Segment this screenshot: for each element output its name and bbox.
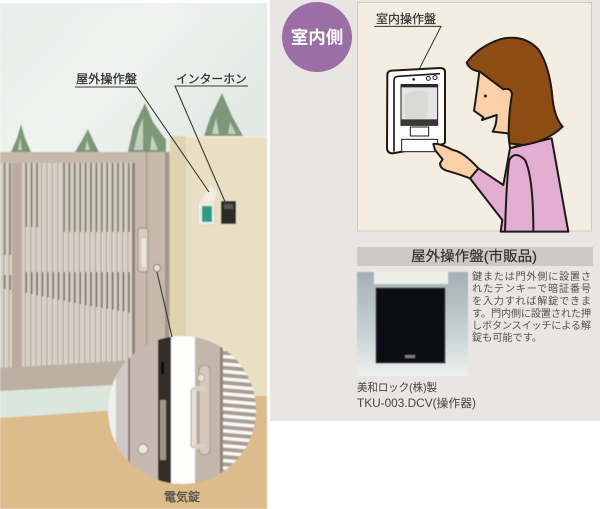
heading: outdoor operator panel (retail): 屋外操作盤(市販品): [411, 248, 537, 264]
label: indoor operator panel: 室内操作盤: [376, 11, 436, 26]
product caption: [357, 380, 476, 410]
woman: face: [474, 72, 527, 148]
gate vertical slats: [0, 163, 134, 368]
panel: outdoor gate photo: [0, 3, 267, 509]
product photo: operator panel: [357, 272, 468, 376]
gate frame: [0, 152, 134, 163]
badge: indoor side: [282, 2, 352, 72]
description text: を入力すれば解錠できま: [472, 294, 591, 308]
magnifier: electric lock detail: [108, 336, 259, 486]
badge: indoor side: 室内側: [291, 28, 343, 48]
description text: 鍵または門外側に設置さ: [472, 270, 591, 283]
product caption: TKU-003.DCV(操作器): [357, 396, 476, 410]
product caption: 美和ロック(株)製: [357, 380, 437, 394]
label: outdoor operator panel: 屋外操作盤: [76, 71, 137, 86]
trees behind gate: [11, 93, 243, 152]
boundary wall: [170, 136, 267, 396]
description text: す。門内側に設置された押: [472, 307, 591, 320]
sky background: [0, 3, 267, 153]
ground: [0, 396, 267, 509]
indoor wall monitor: [387, 68, 445, 153]
description text: れたテンキーで暗証番号: [472, 283, 591, 295]
woman: hand: [433, 144, 478, 178]
heading: outdoor operator panel (retail): [357, 247, 593, 266]
plinth: [0, 380, 118, 418]
right background panel: [270, 0, 600, 421]
intercom unit: [221, 201, 236, 224]
description text: 錠も可能です。: [472, 331, 542, 344]
leader lines: [75, 86, 248, 337]
description text: [472, 270, 591, 344]
label leader line: [374, 26, 441, 79]
label: intercom: インターホン: [176, 72, 247, 86]
label: electric lock: 電気錠: [164, 489, 200, 504]
description text: しボタンスイッチによる解: [472, 319, 591, 332]
gate handle: [138, 228, 160, 272]
outdoor operator panel: [198, 186, 217, 225]
gate infill backing: [0, 163, 134, 368]
woman: body: [470, 138, 568, 232]
woman: hair: [467, 38, 563, 145]
panel: indoor illustration: [358, 2, 592, 232]
